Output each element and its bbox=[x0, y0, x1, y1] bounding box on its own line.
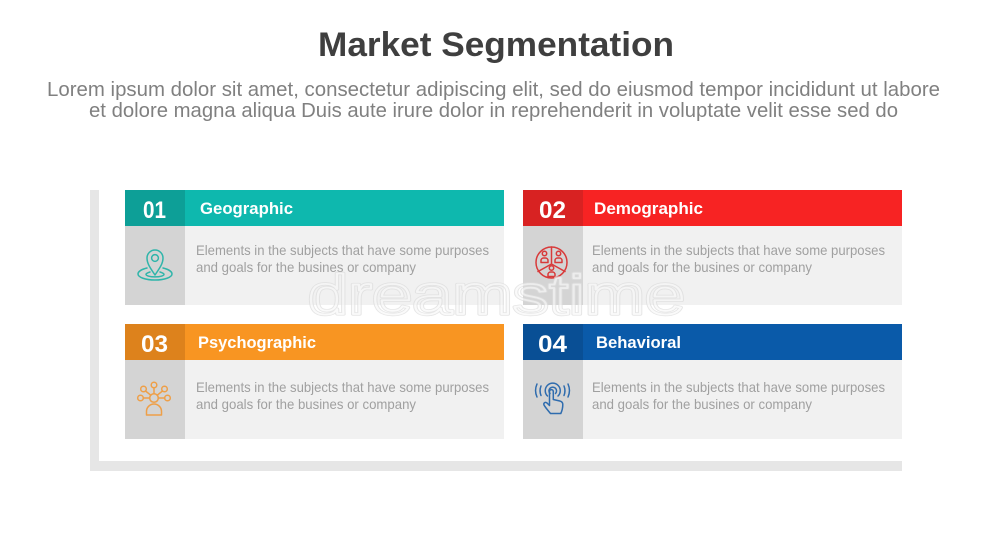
description text bbox=[592, 380, 885, 412]
description text: Elements in the subjects that have some purposes bbox=[196, 243, 489, 258]
heading: Demographic: Demographic bbox=[594, 200, 703, 218]
description text: and goals for the busines or company bbox=[592, 397, 812, 412]
description text bbox=[592, 243, 885, 275]
icon: person with network nodes bbox=[138, 382, 170, 415]
number 01: 01 bbox=[143, 197, 166, 224]
description text: and goals for the busines or company bbox=[196, 260, 416, 275]
number 02: 02 bbox=[539, 197, 566, 224]
heading: Geographic: Geographic bbox=[200, 200, 293, 218]
description text: Elements in the subjects that have some purposes bbox=[196, 380, 489, 395]
L-shaped frame bbox=[90, 190, 902, 471]
panel: 02 Demographic bbox=[523, 190, 902, 305]
watermark: dreamstime bbox=[308, 263, 685, 326]
icon: hand tapping with signal waves bbox=[536, 383, 569, 414]
subtitle text block bbox=[47, 78, 940, 122]
description text bbox=[196, 243, 489, 275]
number 04: 04 bbox=[538, 331, 568, 358]
title: Market Segmentation bbox=[318, 26, 674, 64]
panel: 01 Geographic bbox=[125, 190, 504, 305]
subtitle text block: Lorem ipsum dolor sit amet, consectetur adipiscing elit, sed do eiusmod tempor incididunt ut labore bbox=[47, 78, 940, 101]
heading: Behavioral: Behavioral bbox=[596, 334, 681, 352]
number 03: 03 bbox=[141, 331, 168, 358]
description text: and goals for the busines or company bbox=[592, 260, 812, 275]
icon: map pin bbox=[138, 250, 172, 280]
description text bbox=[196, 380, 489, 412]
panel: 03 Psychographic bbox=[125, 324, 504, 439]
subtitle text block: et dolore magna aliqua Duis aute irure dolor in reprehenderit in voluptate velit esse sed do bbox=[89, 99, 898, 122]
watermark: dreamstime bbox=[308, 263, 685, 326]
description text: and goals for the busines or company bbox=[196, 397, 416, 412]
heading: Psychographic: Psychographic bbox=[198, 334, 316, 352]
panel: 04 Behavioral bbox=[523, 324, 902, 439]
description text: Elements in the subjects that have some purposes bbox=[592, 243, 885, 258]
description text: Elements in the subjects that have some purposes bbox=[592, 380, 885, 395]
icon: segmented people circle bbox=[536, 247, 567, 278]
